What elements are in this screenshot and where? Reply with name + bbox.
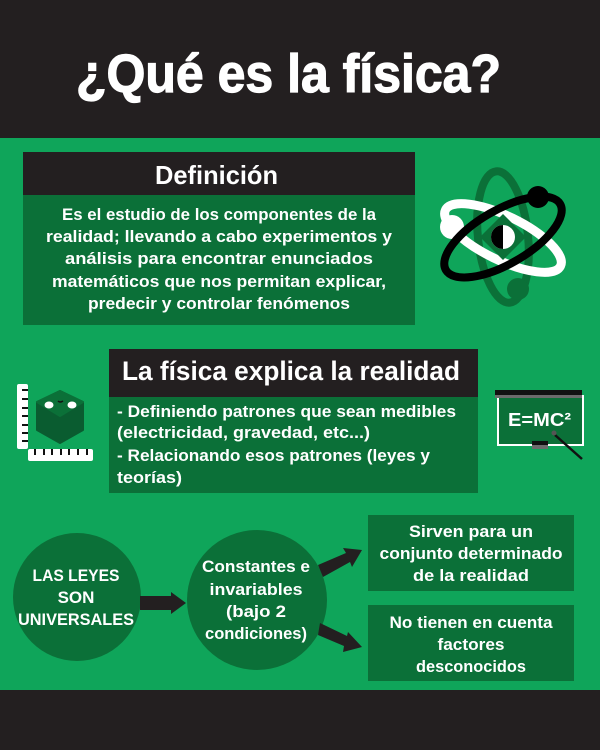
circle: constantes e invariables: Constantes e: [202, 557, 310, 576]
box: sirven para un conjunto: [368, 515, 574, 591]
arrow: to constantes: [140, 592, 186, 614]
heading: definición: Definición: [155, 160, 278, 190]
text block: patrones: teorías): [117, 468, 182, 487]
panel: definición: [23, 152, 415, 325]
icon: atom: [432, 169, 574, 305]
heading: la física explica: La física explica la realidad: [122, 356, 460, 386]
circle: constantes e invariables: invariables: [210, 580, 302, 599]
icon: cube with rulers: [17, 384, 93, 461]
text block: definición: matemáticos que nos permitan explicar,: [52, 272, 386, 291]
text block: definición: predecir y controlar fenómenos: [88, 294, 350, 313]
box: no tienen en cuenta: factores: [438, 635, 504, 654]
circle: las leyes son universales: LAS LEYES: [32, 566, 120, 585]
panel: la física explica la realidad: [109, 349, 478, 493]
text block: definición: Es el estudio de los componentes de la: [62, 205, 377, 224]
box: no tienen en cuenta: [368, 605, 574, 681]
circle: constantes e invariables: [187, 530, 327, 670]
text block: patrones: - Definiendo patrones que sean medibles: [117, 402, 456, 421]
box: no tienen en cuenta: desconocidos: [416, 657, 526, 676]
icon: blackboard: [495, 390, 583, 459]
box: sirven para un conjunto: de la realidad: [413, 566, 529, 585]
text block: definición: análisis para encontrar enunciados: [65, 249, 373, 268]
circle: constantes e invariables: condiciones): [205, 624, 307, 643]
text block: patrones: [117, 402, 456, 487]
footer band: [0, 690, 600, 750]
circle: las leyes son universales: SON: [58, 588, 94, 607]
box: no tienen en cuenta: No tienen en cuenta: [390, 613, 553, 632]
text block: patrones: - Relacionando esos patrones (leyes y: [117, 446, 431, 465]
icon: blackboard: E=MC²: [508, 409, 571, 430]
arrow: to lower box: [318, 623, 362, 652]
box: sirven para un conjunto: conjunto determinado: [380, 544, 562, 563]
circle: constantes e invariables: (bajo 2: [226, 602, 286, 621]
header band: [0, 0, 600, 138]
text block: patrones: (electricidad, gravedad, etc...): [117, 423, 370, 442]
circle: las leyes son universales: UNIVERSALES: [18, 610, 134, 629]
title: ¿Qué es la física?: [76, 44, 501, 104]
text block: definición: [46, 205, 393, 313]
text block: definición: realidad; llevando a cabo experimentos y: [46, 227, 393, 246]
circle: las leyes son universales: [13, 533, 141, 661]
arrow: to upper box: [318, 548, 362, 577]
box: sirven para un conjunto: Sirven para un: [409, 522, 533, 541]
